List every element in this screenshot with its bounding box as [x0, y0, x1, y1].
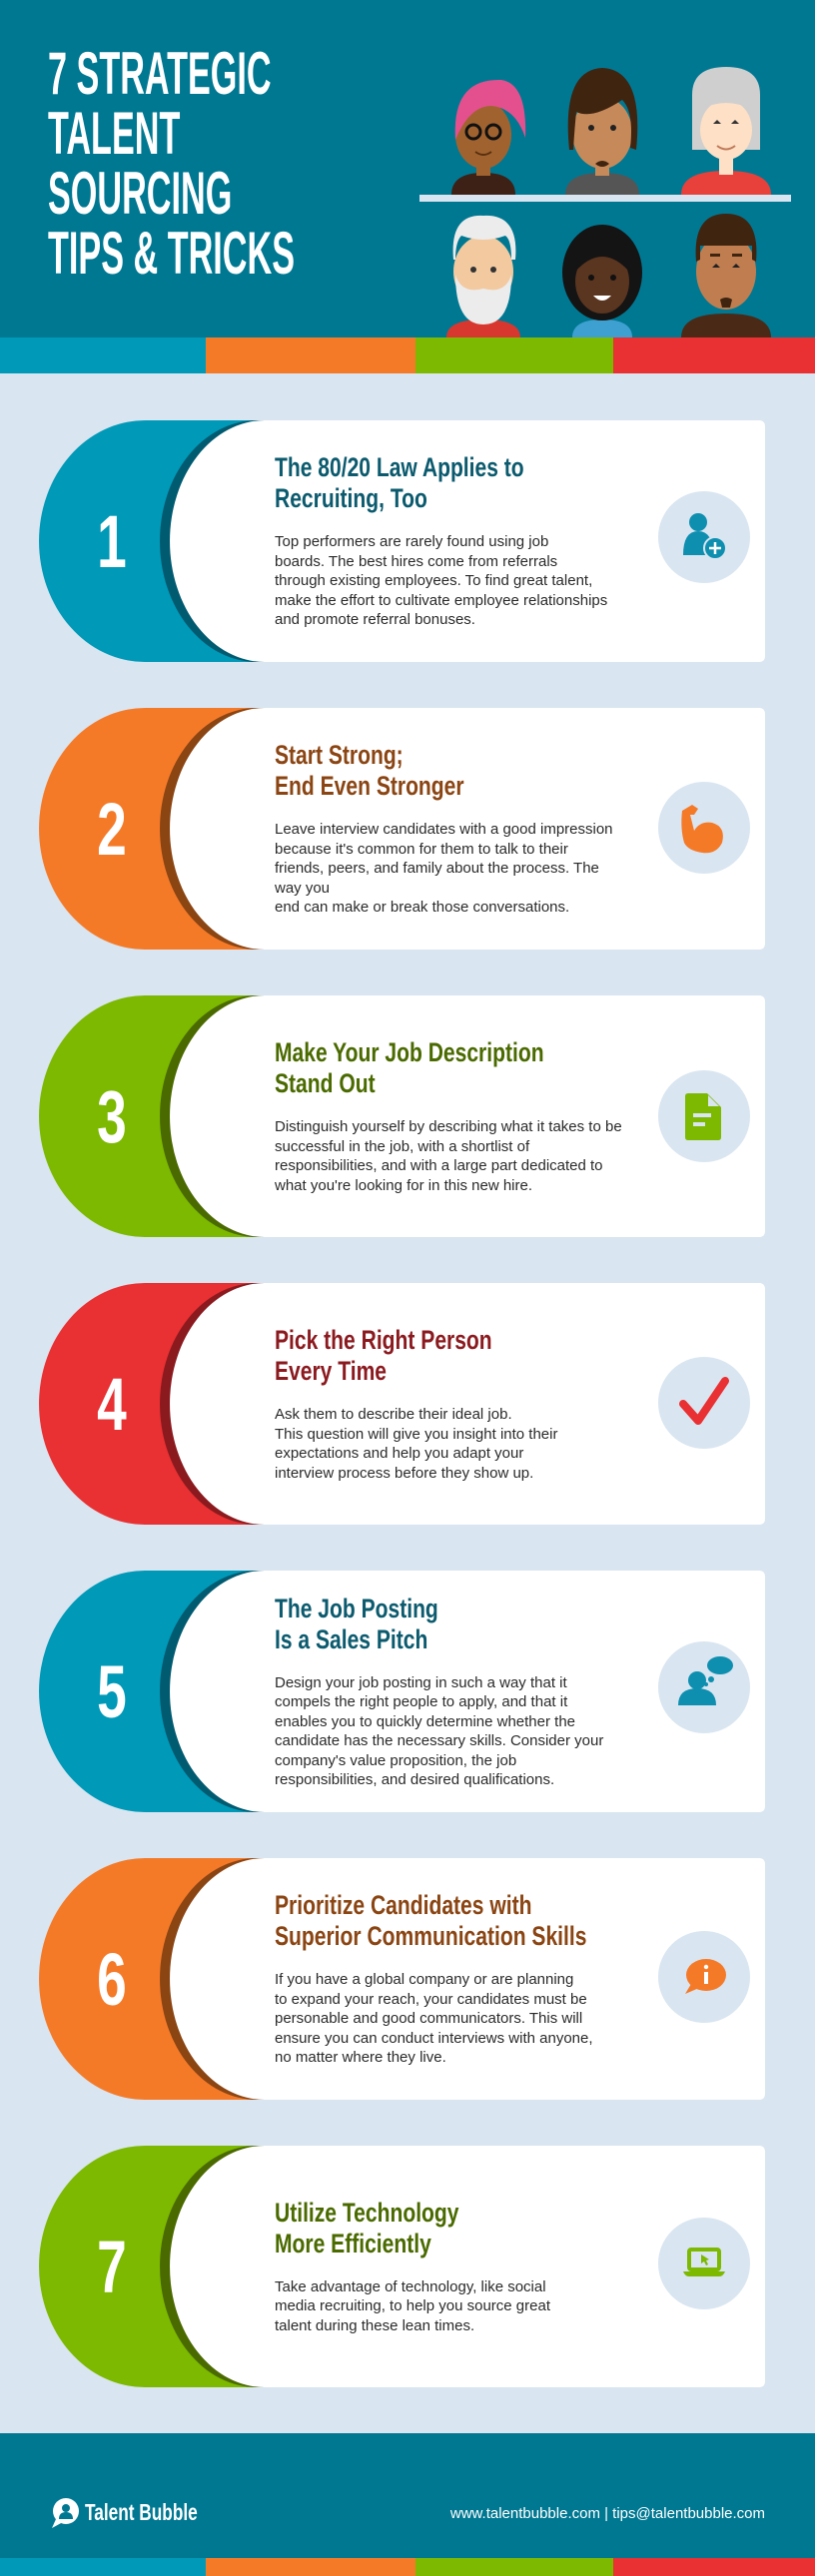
text: tip 5: The Job Posting	[275, 1594, 438, 1623]
icon: document	[658, 1070, 750, 1162]
text: tip 6: to expand your reach, your candidates must be	[275, 1991, 587, 2008]
text: tip 3: successful in the job, with a shortlist of	[275, 1138, 529, 1154]
card 1	[39, 420, 765, 662]
text: tip 4: expectations and help you adapt your	[275, 1445, 523, 1462]
text: tip 1: Recruiting, Too	[275, 483, 427, 513]
text: tip 6: Superior Communication Skills	[275, 1921, 586, 1951]
card 4: 4	[97, 1363, 127, 1446]
text: tip 5: Design your job posting in such a way that it	[275, 1673, 567, 1691]
text: tip 3: what you're looking for in this new hire.	[275, 1176, 532, 1194]
text: tip 7: talent during these lean times.	[275, 2317, 474, 2334]
face 2	[565, 68, 639, 195]
text: tip 6	[275, 1890, 593, 2066]
text: tip 2: Start Strong;	[275, 740, 404, 770]
text: tip 2	[275, 740, 613, 916]
logo: Talent Bubble	[85, 2499, 198, 2525]
card 7: 7	[97, 2226, 127, 2308]
icon: flexed arm	[658, 782, 750, 874]
icon: laptop	[658, 2218, 750, 2309]
text: tip 7: More Efficiently	[275, 2229, 431, 2258]
text: tip 6: Prioritize Candidates with	[275, 1890, 531, 1920]
shelf	[419, 195, 791, 202]
text: tip 4: Ask them to describe their ideal job.	[275, 1406, 512, 1423]
icon: person add	[658, 491, 750, 583]
text: tip 6: ensure you can conduct interviews with anyone,	[275, 2030, 593, 2047]
text: tip 1: make the effort to cultivate employee relationships	[275, 592, 607, 609]
text: tip 1: boards. The best hires come from referrals	[275, 553, 557, 570]
text: tip 5: candidate has the necessary skills. Consider your	[275, 1732, 603, 1749]
text: tip 6: personable and good communicators. This will	[275, 2010, 582, 2027]
card 2: 2	[97, 788, 127, 871]
text: tip 3: responsibilities, and with a large part dedicated to	[275, 1157, 603, 1174]
text: tip 5: compels the right people to apply, and that it	[275, 1693, 567, 1710]
text: tip 1: and promote referral bonuses.	[275, 611, 475, 628]
text: tip 2: End Even Stronger	[275, 771, 464, 801]
card 6	[39, 1858, 765, 2100]
title: SOURCING	[48, 160, 232, 227]
card 3	[39, 995, 765, 1237]
card 1: 1	[97, 500, 127, 583]
footer	[0, 2433, 815, 2558]
text: tip 5: responsibilities, and desired qualifications.	[275, 1771, 554, 1788]
text: tip 5	[275, 1594, 603, 1788]
icon: check	[658, 1357, 750, 1449]
text: tip 4: Pick the Right Person	[275, 1325, 492, 1355]
face 3	[681, 67, 771, 195]
text: tip 1: through existing employees. To find great talent,	[275, 572, 592, 589]
illustration: faces	[419, 67, 791, 337]
text: tip 7: media recruiting, to help you source great	[275, 2297, 550, 2314]
icon: info bubble	[658, 1931, 750, 2023]
text: tip 5: Is a Sales Pitch	[275, 1623, 427, 1653]
text: tip 1	[275, 452, 607, 628]
face 1 pink hair	[451, 80, 525, 195]
text: tip 4: This question will give you insight into their	[275, 1426, 557, 1442]
title: TALENT	[48, 100, 180, 167]
card 5	[39, 1571, 765, 1812]
text: tip 4: Every Time	[275, 1356, 387, 1386]
text: tip 7	[275, 2198, 550, 2334]
contact: www.talentbubble.com | tips@talentbubble.com	[450, 2505, 765, 2522]
title	[48, 40, 295, 287]
text: tip 5: company's value proposition, the job	[275, 1751, 516, 1769]
card 7	[39, 2146, 765, 2387]
logo	[52, 2498, 198, 2528]
color bar top	[0, 337, 815, 373]
card 4	[39, 1283, 765, 1525]
text: tip 3: Make Your Job Description	[275, 1037, 544, 1067]
text: tip 2: Leave interview candidates with a good impression	[275, 821, 613, 838]
text: tip 1: The 80/20 Law Applies to	[275, 452, 524, 482]
text: tip 2: friends, peers, and family about the process. The	[275, 860, 599, 877]
title: TIPS & TRICKS	[48, 220, 295, 287]
card 3: 3	[97, 1075, 127, 1158]
text: tip 7: Take advantage of technology, like social	[275, 2278, 546, 2295]
title: 7 STRATEGIC	[48, 40, 272, 107]
text: tip 7: Utilize Technology	[275, 2198, 458, 2228]
text: tip 2: because it's common for them to talk to their	[275, 841, 568, 858]
text: tip 6: If you have a global company or are planning	[275, 1971, 573, 1988]
text: tip 1: Top performers are rarely found using job	[275, 533, 548, 550]
card 6: 6	[97, 1938, 127, 2021]
text: tip 2: end can make or break those conversations.	[275, 899, 569, 916]
card 2	[39, 708, 765, 950]
text: tip 3: Distinguish yourself by describing what it takes to be	[275, 1118, 622, 1135]
icon: person thinking	[658, 1641, 750, 1733]
face 6	[681, 214, 771, 337]
text: tip 6: no matter where they live.	[275, 2049, 446, 2066]
text: tip 3: Stand Out	[275, 1068, 376, 1098]
header	[0, 0, 815, 339]
text: tip 4: interview process before they show up.	[275, 1464, 533, 1482]
text: tip 4	[275, 1325, 557, 1482]
card 5: 5	[97, 1650, 127, 1733]
text: tip 3	[275, 1037, 622, 1194]
text: tip 2: way you	[275, 880, 330, 897]
face 4 old man	[446, 216, 520, 337]
face 5 curly hair	[562, 225, 642, 337]
color bar bottom	[0, 2558, 815, 2576]
text: tip 5: enables you to quickly determine whether the	[275, 1713, 575, 1729]
